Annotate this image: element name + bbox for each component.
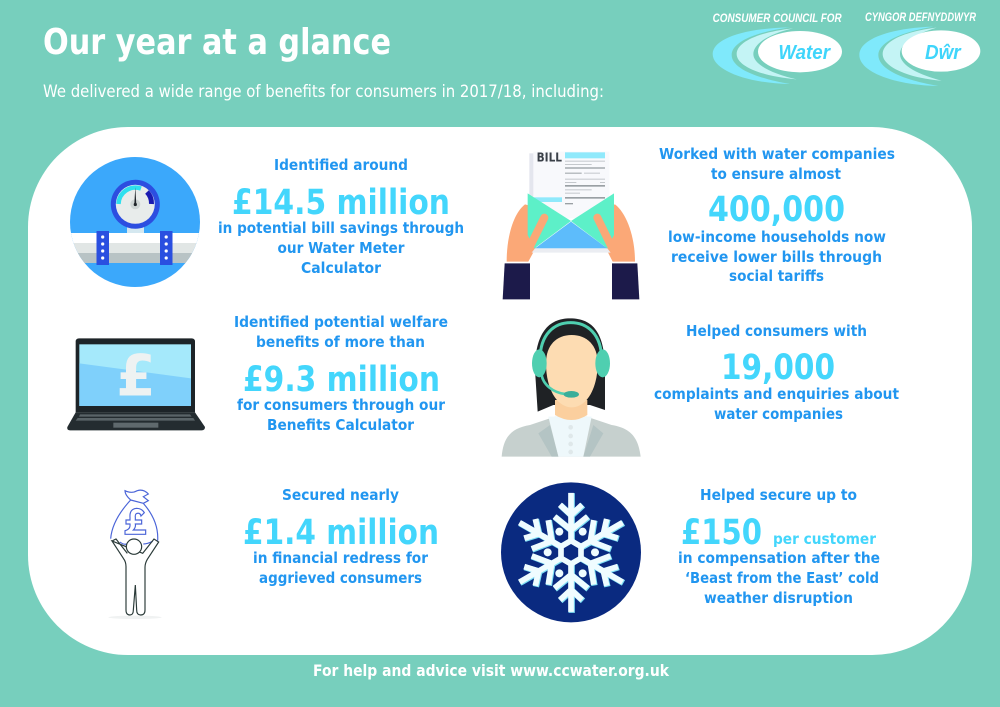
logo: Cyngor Defnyddwyr Dŵr: CYNGOR DEFNYDDWYR xyxy=(865,11,976,24)
text block: financial redress: £1.4 million xyxy=(243,513,439,553)
text block: financial redress: aggrieved consumers xyxy=(259,569,422,587)
text block: cold weather compensation: Helped secure up to xyxy=(700,486,857,504)
text block: social tariffs: 400,000 xyxy=(708,190,845,230)
text block: cold weather compensation: in compensation after the xyxy=(678,549,880,567)
logo: Cyngor Defnyddwyr Dŵr: Dŵr xyxy=(925,41,962,64)
icon: water meter on pipe xyxy=(70,157,200,287)
text block: water meter savings: £14.5 million xyxy=(232,183,450,223)
text block: social tariffs xyxy=(659,145,895,285)
text block: social tariffs: Worked with water companies xyxy=(659,145,895,163)
text block: cold weather compensation xyxy=(678,486,880,607)
text block: welfare benefits: £9.3 million xyxy=(243,360,440,400)
text block: social tariffs: to ensure almost xyxy=(711,165,842,183)
text block: water meter savings: Calculator xyxy=(301,259,381,277)
text block: social tariffs: receive lower bills through xyxy=(671,248,882,266)
logo: Consumer Council for Water xyxy=(713,12,842,84)
text block: cold weather compensation: ‘Beast from the East’ cold xyxy=(685,569,879,587)
text block: water meter savings: Identified around xyxy=(274,156,408,174)
text block: complaints and enquiries: water companies xyxy=(714,405,843,423)
text block: financial redress: Secured nearly xyxy=(282,486,399,504)
logo: Consumer Council for Water: Water xyxy=(778,41,831,64)
text block: cold weather compensation: £150 xyxy=(681,513,762,553)
text block: water meter savings: in potential bill savings through xyxy=(218,219,464,237)
text block: complaints and enquiries xyxy=(654,322,900,423)
icon: call centre agent with headset xyxy=(502,318,641,457)
text block: welfare benefits: Benefits Calculator xyxy=(267,416,414,434)
text block: water meter savings: our Water Meter xyxy=(278,239,405,257)
icon: laptop with pound sign: £ xyxy=(116,344,156,410)
text block: financial redress xyxy=(243,486,439,587)
icon: figure lifting a money bag xyxy=(108,490,162,619)
text block: welfare benefits xyxy=(234,313,448,434)
logo: Cyngor Defnyddwyr Dŵr xyxy=(859,11,980,86)
footer: help and advice: For help and advice visit www.ccwater.org.uk xyxy=(313,661,669,680)
text block: welfare benefits: Identified potential welfare xyxy=(234,313,448,331)
icon: laptop with pound sign xyxy=(67,338,205,430)
icon: bill in envelope held by hands xyxy=(503,151,639,299)
panel: white rounded card xyxy=(28,127,972,655)
text block: financial redress: in financial redress for xyxy=(253,549,428,567)
icon: snowflake xyxy=(501,482,641,622)
text block: cold weather compensation: per customer xyxy=(773,530,876,548)
text block: complaints and enquiries: 19,000 xyxy=(721,348,835,388)
text block: welfare benefits: for consumers through our xyxy=(237,396,445,414)
text block: social tariffs: low-income households now xyxy=(668,228,886,246)
subtitle: We delivered a wide range of benefits for consumers in 2017/18, including: xyxy=(43,82,604,101)
text block: complaints and enquiries: Helped consumers with xyxy=(686,322,867,340)
icon: bill in envelope held by hands: BILL xyxy=(537,151,562,165)
title: Our year at a glance xyxy=(43,22,391,63)
text block: cold weather compensation: weather disruption xyxy=(704,589,853,607)
logo: Consumer Council for Water: CONSUMER COUNCIL FOR xyxy=(713,12,842,25)
text block: welfare benefits: benefits of more than xyxy=(256,333,425,351)
text block: complaints and enquiries: complaints and enquiries about xyxy=(654,385,900,403)
text block: social tariffs: social tariffs xyxy=(729,267,824,285)
text block: water meter savings xyxy=(218,156,464,277)
